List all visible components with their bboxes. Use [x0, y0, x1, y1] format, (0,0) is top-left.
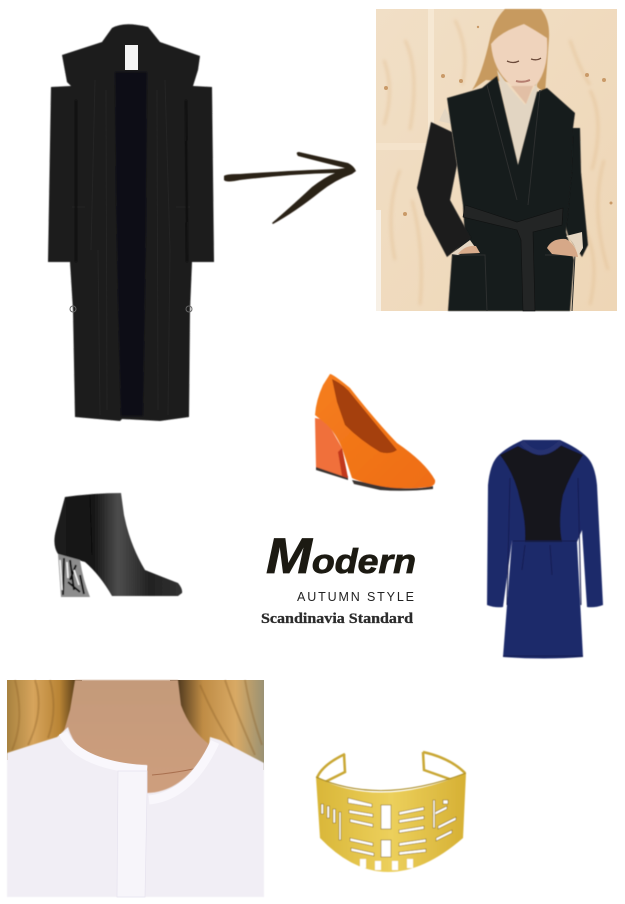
boot metallic heel [58, 554, 90, 597]
product: gold cuff bracelet [316, 752, 466, 872]
coat lapel lines [452, 85, 575, 311]
right cuff and hand [566, 232, 583, 256]
bracelet front body [316, 773, 466, 872]
shoe sole shadow [316, 466, 433, 491]
photo background hair right [170, 680, 264, 770]
blouse placket [117, 771, 147, 897]
bracelet bottom windows [360, 859, 413, 870]
photo: white blouse close-up [7, 680, 264, 897]
photo background hair left [7, 680, 82, 760]
boot upper [54, 493, 182, 596]
blouse [7, 727, 264, 897]
dress details [503, 478, 583, 656]
coat left sleeve on model [417, 122, 471, 257]
photo: model wearing coat [376, 9, 617, 311]
wood seams and grain [376, 9, 612, 311]
coat on model [447, 76, 575, 311]
shoe heel [315, 418, 348, 478]
collarbone shadow [152, 768, 198, 775]
brand name: Scandinavia Standard [261, 611, 413, 627]
belt [463, 205, 563, 311]
hand-drawn arrow [224, 152, 356, 224]
dress collar [522, 442, 561, 452]
bracelet back rim [317, 752, 465, 778]
dress base [487, 440, 603, 658]
dress black panel [500, 445, 583, 542]
model eyes and lips [507, 58, 541, 82]
coat side rings [70, 306, 192, 312]
coat neck label [125, 45, 138, 70]
hair strands [12, 680, 262, 755]
bracelet rim highlight [316, 773, 466, 791]
subtitle: AUTUMN STYLE [297, 590, 414, 604]
left cuff and hand [451, 240, 475, 255]
left inner sleeve [439, 108, 452, 124]
boot seam [90, 495, 92, 555]
neck skin [511, 86, 533, 104]
product: navy knit dress [487, 440, 603, 658]
model face [491, 24, 547, 89]
beige turtleneck [497, 70, 537, 165]
title block [261, 528, 416, 627]
model hair [472, 9, 549, 93]
product: black long coat [48, 24, 214, 421]
brush lettering: Modern: Modern [266, 528, 416, 584]
neck [60, 680, 210, 805]
product: orange block heel pump [315, 374, 435, 491]
product: black ankle boot with silver heel [54, 493, 182, 597]
shoe suede upper [315, 374, 435, 488]
blouse collar band [63, 733, 215, 800]
bracelet cut-outs [321, 798, 456, 857]
right sleeve on model [558, 128, 588, 257]
shoe inner [332, 379, 397, 453]
wood wall background [376, 9, 617, 311]
